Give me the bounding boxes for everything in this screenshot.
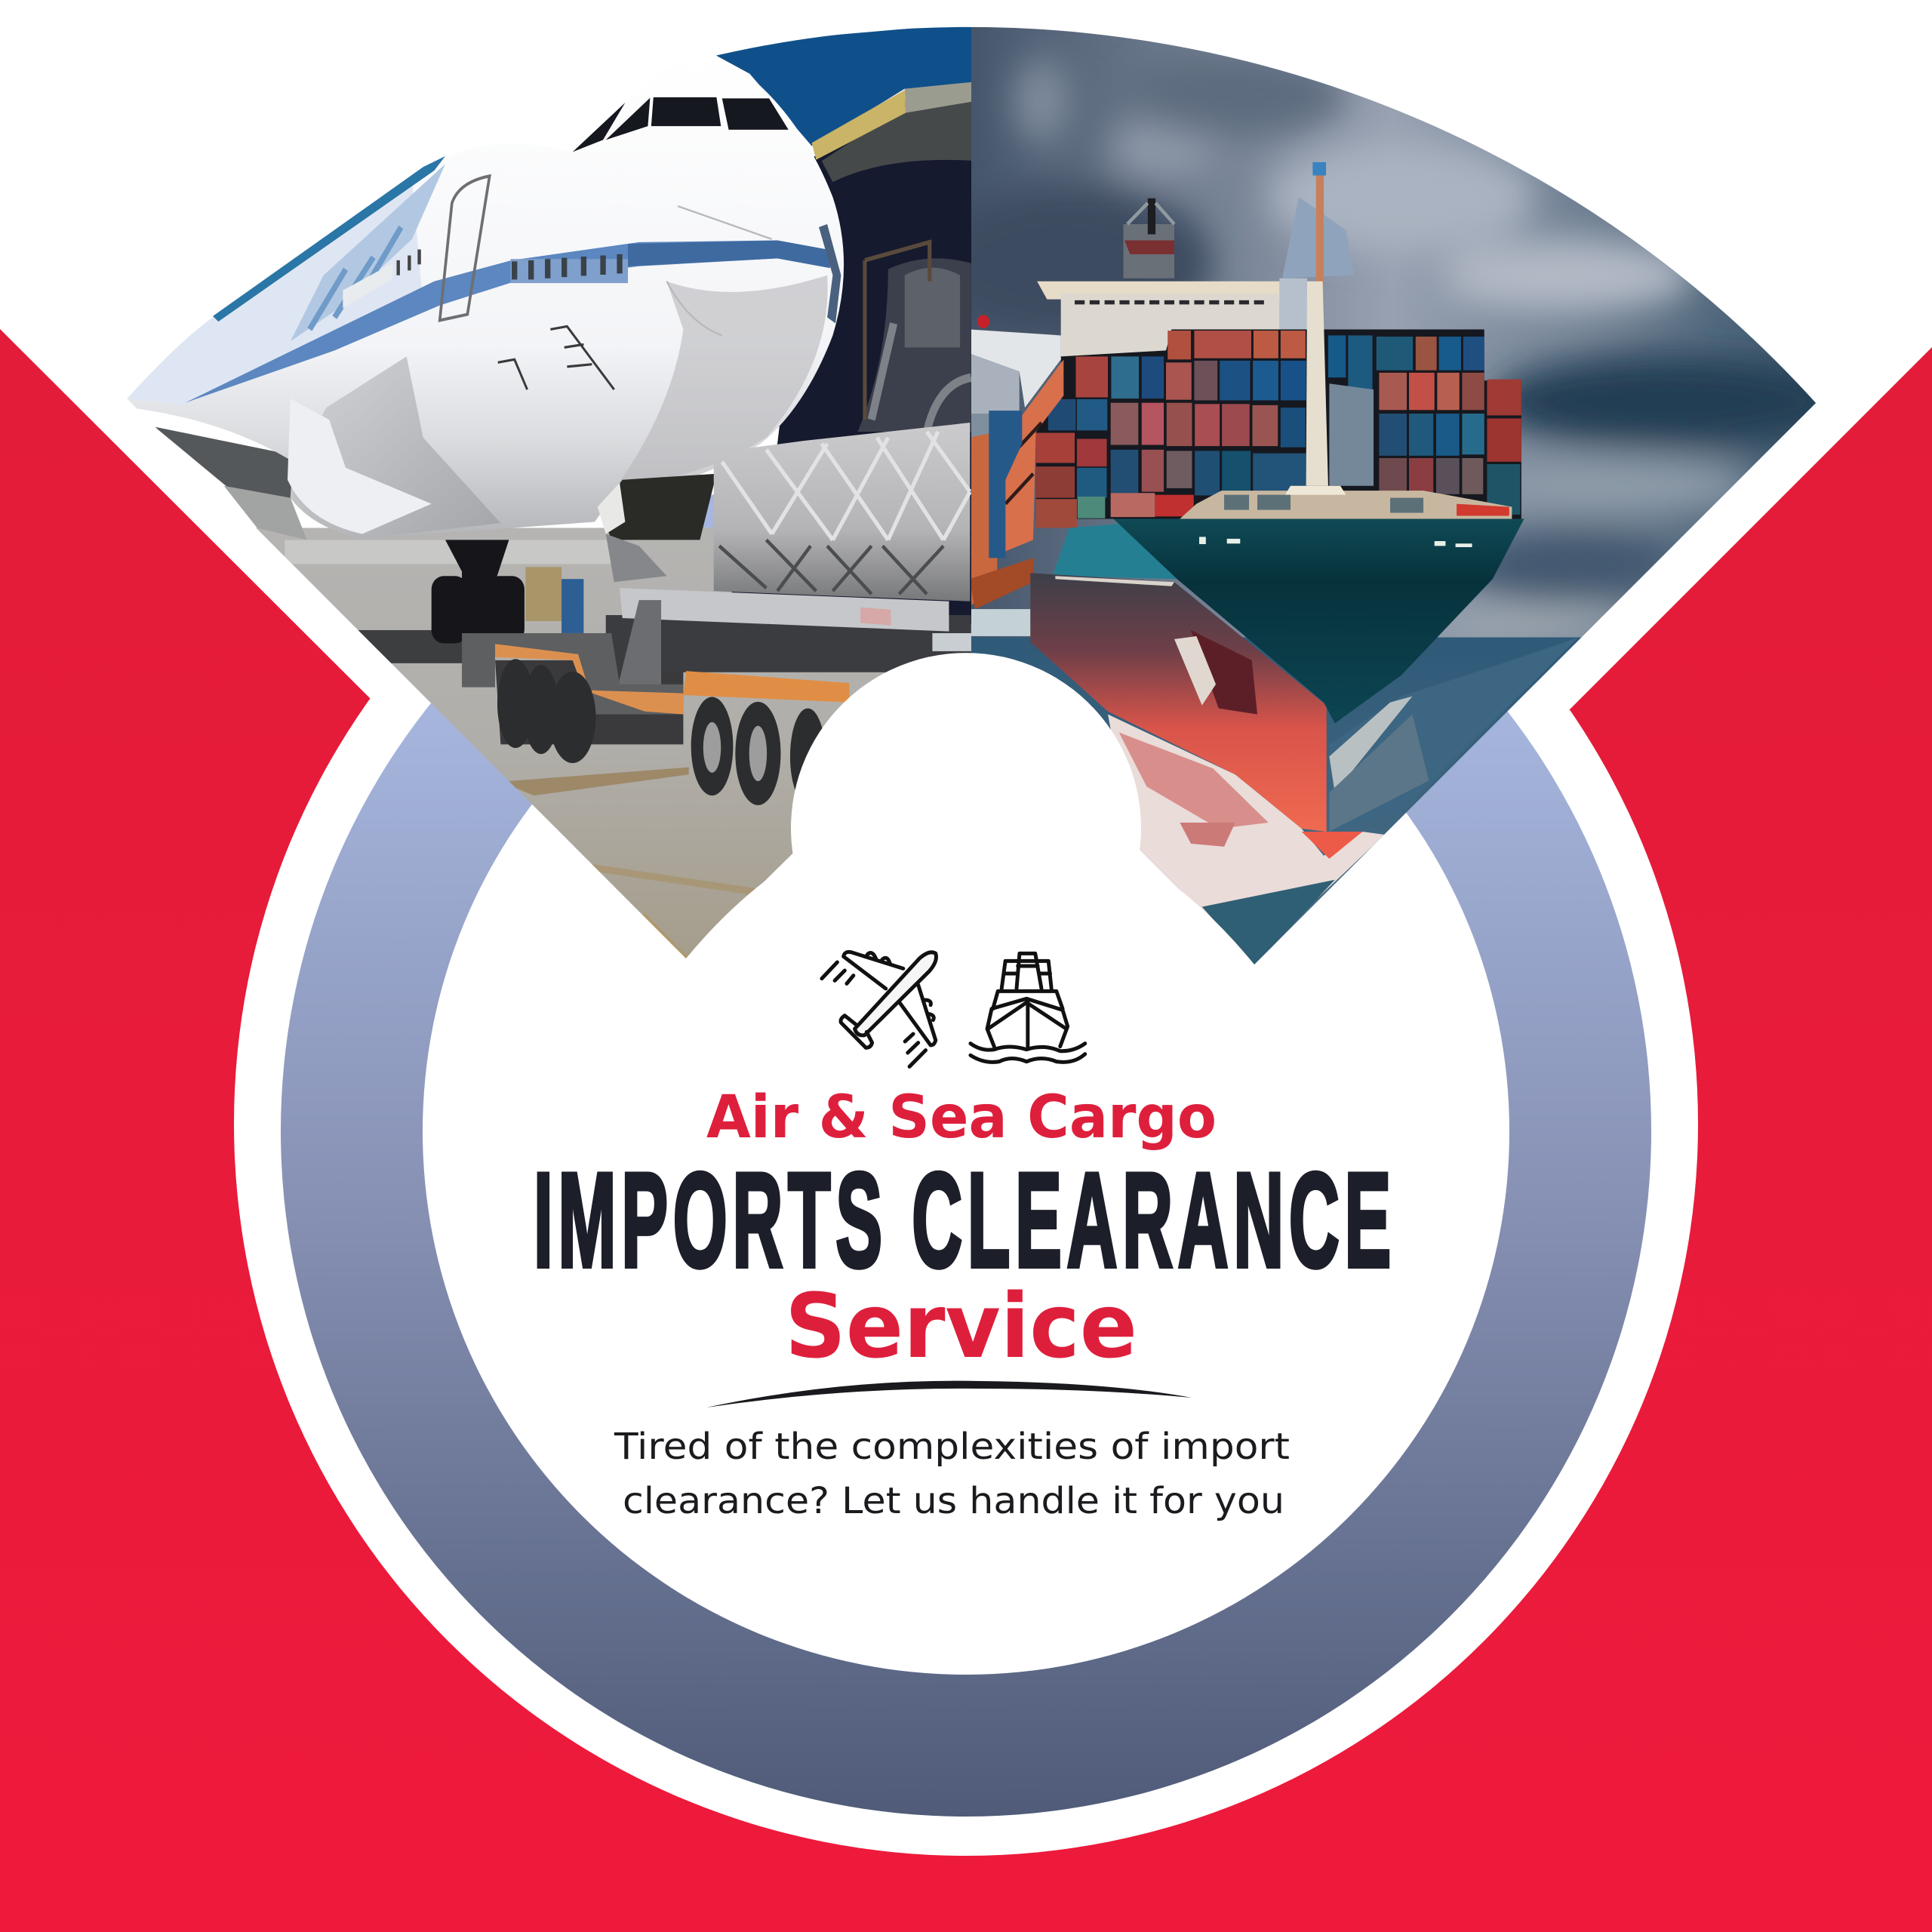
blue cheatline: [185, 241, 830, 403]
truck wheels: [497, 659, 826, 805]
foredeck clutter: [1180, 491, 1512, 519]
white head and shoulders cut-out: [686, 653, 1254, 1072]
truck platform: [620, 588, 949, 632]
lower white deck: [970, 329, 1061, 408]
body line 1: Tired of the complexities of import: [614, 1426, 1290, 1468]
white inner circle: [423, 588, 1509, 1675]
right wake: [1329, 638, 1578, 832]
stormy sky: [958, 23, 1826, 685]
rear belly: [155, 427, 296, 504]
cockpit windows: [573, 97, 789, 152]
port side orange containers: [1004, 359, 1063, 552]
loader truck: [462, 567, 977, 805]
side hull teal: [1053, 519, 1180, 579]
main landing gear: [445, 540, 509, 582]
gradient ring: [281, 446, 1651, 1817]
photo: air cargo plane: [113, 23, 977, 967]
window row: [511, 259, 628, 283]
truck chassis: [462, 633, 683, 715]
fuselage: [127, 58, 844, 539]
swoosh divider: [706, 1381, 1192, 1407]
white upper wedge: [0, 0, 1932, 1132]
containers: [1036, 331, 1521, 528]
ship mast column: [1306, 281, 1328, 486]
truck dark under-frame: [495, 660, 683, 744]
heading: Service: Service: [785, 1274, 1137, 1378]
icon: airplane: [822, 952, 936, 1066]
pale blue rear fuselage tint: [127, 179, 423, 405]
heading: Air & Sea Cargo: Air & Sea Cargo: [706, 1084, 1217, 1152]
bow wave foam: [1108, 715, 1385, 966]
top dark strip: [213, 156, 445, 321]
runway ground: [113, 528, 977, 967]
bridge deck: [1037, 281, 1279, 300]
livery lettering: [291, 164, 445, 341]
mast structure: [1282, 197, 1354, 278]
body line 2: clearance? Let us handle it for you: [623, 1480, 1284, 1522]
fuselage panel marks: [498, 326, 614, 389]
heading: Imports Clearance: IMPORTS CLEARANCE: [534, 1146, 1391, 1296]
photo fan: [113, 23, 1844, 974]
body text: [614, 1426, 1290, 1522]
white outer circle: [234, 392, 1698, 1856]
icons row: [822, 952, 1085, 1066]
icon: container ship: [971, 953, 1085, 1062]
bow hull front: [1113, 519, 1524, 724]
cargo hold interior: [722, 83, 977, 624]
truck yellow equipment: [525, 567, 561, 621]
cabin door: [440, 176, 490, 321]
nose gear bay: [600, 474, 716, 540]
ship funnel and radar: [1124, 224, 1174, 278]
side hull red: [1030, 573, 1327, 832]
photo: container ship at sea: [925, 23, 1844, 974]
sea surface: [958, 638, 1826, 974]
lower wing fairing: [293, 356, 500, 539]
netted cargo pallet: [714, 423, 970, 601]
blue sky: [700, 23, 977, 146]
nose belly shading: [617, 275, 828, 486]
clouds: [925, 53, 1844, 636]
dark water triangle: [1202, 880, 1335, 966]
container stack backing: [1036, 329, 1521, 519]
